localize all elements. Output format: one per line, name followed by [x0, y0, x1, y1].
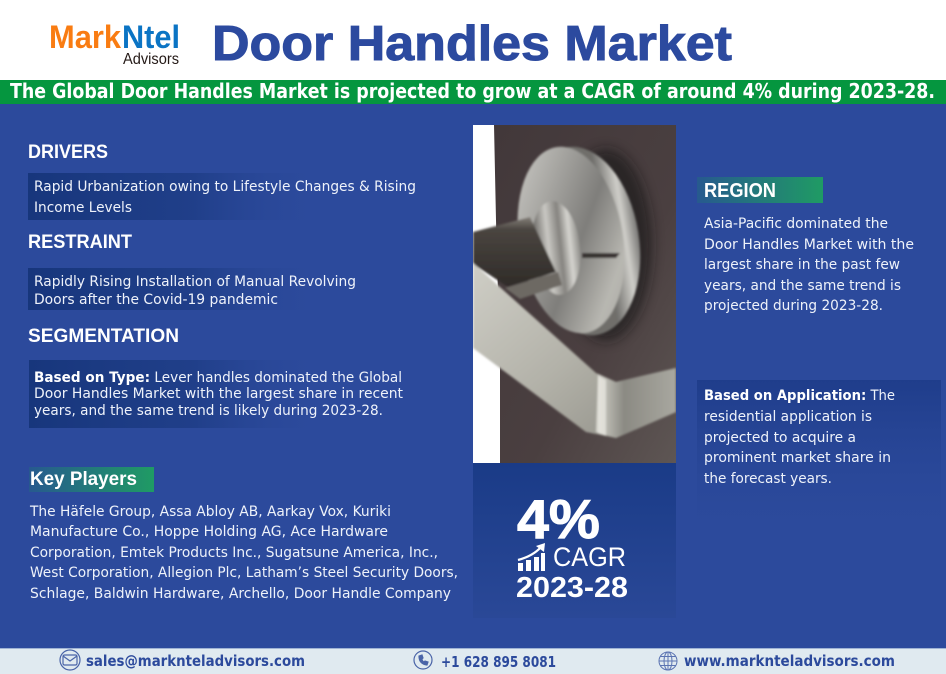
- text: drivers detail: Income Levels: [34, 200, 132, 216]
- text: restraint detail: Doors after the Covid-19 pandemic: [34, 292, 278, 308]
- text: application detail: [704, 388, 895, 487]
- heading: restraint: RESTRAINT: [28, 231, 132, 253]
- icon: email: [60, 650, 80, 670]
- text: region detail: largest share in the past few: [704, 257, 900, 273]
- text: application detail: residential application is: [704, 409, 872, 425]
- text: key players list: The Häfele Group, Assa Abloy AB, Aarkay Vox, Kuriki: [29, 504, 391, 520]
- text: region detail: projected during 2023-28.: [704, 298, 883, 314]
- text: key players list: Manufacture Co., Hoppe Holding AG, Ace Hardware: [30, 524, 388, 540]
- contact: website: www.marknteladvisors.com: [684, 652, 895, 670]
- heading: segmentation: SEGMENTATION: [28, 325, 179, 347]
- icon: phone: [414, 651, 432, 669]
- text: based on type: years, and the same trend is likely during 2023-28.: [34, 403, 383, 419]
- icon: growth chart: [518, 543, 545, 571]
- panel: CAGR stat: [473, 463, 676, 618]
- contact: email: sales@marknteladvisors.com: [86, 652, 305, 670]
- text: key players list: [29, 504, 458, 602]
- panel: segmentation by type: [28, 325, 403, 428]
- panel: drivers: [28, 141, 416, 220]
- header band: [0, 0, 946, 80]
- icon: globe: [659, 652, 677, 670]
- label: forecast period: 2023-28: [516, 572, 628, 604]
- heading: region: REGION: [704, 180, 776, 202]
- text: application detail: Based on Application: The: [704, 388, 895, 404]
- text: restraint detail: [34, 274, 356, 308]
- logo: MarkNtel Advisors: Ntel: [122, 19, 180, 55]
- text: key players list: Corporation, Emtek Products Inc., Sugatsune America, Inc.,: [30, 545, 438, 561]
- text: application detail: prominent market share in: [704, 450, 891, 466]
- text: based on type: Door Handles Market with the largest share in recent: [34, 386, 403, 402]
- text: drivers detail: [34, 179, 416, 216]
- contact: phone: +1 628 895 8081: [441, 653, 556, 671]
- panel: region: [697, 177, 914, 314]
- text: application detail: the forecast years.: [704, 471, 832, 487]
- text: key players list: Schlage, Baldwin Hardware, Archello, Door Handle Company: [30, 586, 451, 602]
- text: key players list: West Corporation, Allegion Plc, Latham’s Steel Security Doors,: [30, 565, 458, 581]
- panel: restraint: [28, 231, 356, 310]
- text: region detail: Door Handles Market with the: [704, 237, 914, 253]
- text: application detail: projected to acquire a: [704, 430, 856, 446]
- footer bar: [0, 648, 946, 674]
- heading: key players: Key Players: [30, 469, 137, 490]
- heading: region: [697, 177, 823, 203]
- text: based on type: [34, 370, 403, 419]
- text: based on type: Based on Type: Lever handles dominated the Global: [34, 370, 402, 386]
- stat: 4%: 4%: [517, 488, 600, 550]
- logo: MarkNtel Advisors: [49, 19, 180, 68]
- text: region detail: years, and the same trend is: [704, 278, 901, 294]
- text: region detail: [704, 216, 914, 314]
- label: CAGR: CAGR: [553, 542, 626, 572]
- panel: key players: [29, 467, 458, 602]
- text: restraint detail: Rapidly Rising Installation of Manual Revolving: [34, 274, 356, 290]
- text: drivers detail: Rapid Urbanization owing to Lifestyle Changes & Rising: [34, 179, 416, 195]
- photo: door handle: [473, 125, 676, 463]
- logo: MarkNtel Advisors: Mark: [49, 19, 121, 55]
- text: region detail: Asia-Pacific dominated the: [704, 216, 888, 232]
- title: Door Handles Market: [212, 17, 732, 71]
- heading: drivers: DRIVERS: [28, 141, 108, 163]
- logo: MarkNtel Advisors: Advisors: [123, 51, 179, 68]
- panel: based on application: [697, 380, 941, 550]
